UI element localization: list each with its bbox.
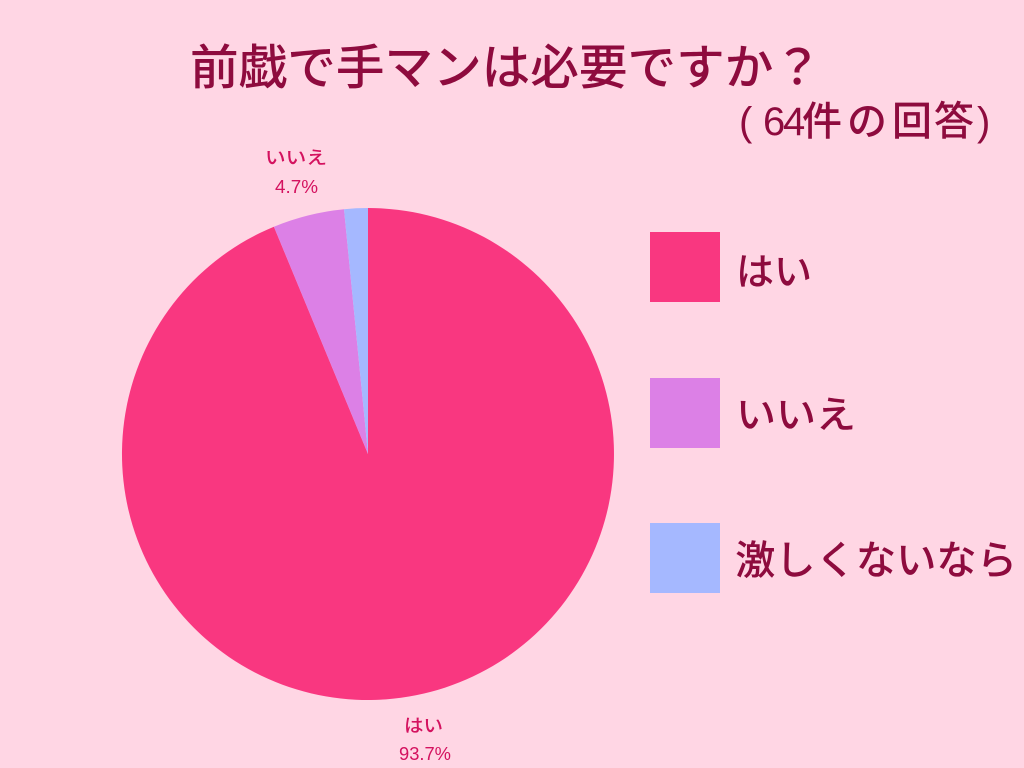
- legend item: いいえ: いいえ: [736, 395, 856, 437]
- slice: 激しくないなら: [344, 208, 368, 454]
- legend: [650, 232, 1017, 593]
- slice: はい 93.7%: [122, 208, 614, 700]
- data label: はい 93.7%: はい: [404, 716, 443, 736]
- data label: いいえ 4.7%: いいえ: [265, 148, 327, 168]
- data label: いいえ 4.7%: [265, 148, 327, 197]
- title: 前戯で手マンは必要ですか？: [190, 42, 822, 95]
- legend item: 激しくないなら: 激しくないなら: [735, 539, 1017, 583]
- legend item: 激しくないなら: [650, 523, 1017, 593]
- legend item: はい: はい: [736, 252, 812, 294]
- data label: はい 93.7%: 93.7%: [399, 744, 451, 764]
- slice: いいえ 4.7%: [274, 209, 368, 454]
- subtitle: response count: (64件の回答): [739, 100, 990, 144]
- data label: いいえ 4.7%: 4.7%: [275, 177, 318, 197]
- legend item: いいえ: [650, 378, 856, 448]
- data label: はい 93.7%: [399, 716, 451, 764]
- pie chart: [122, 208, 614, 700]
- legend item: はい: [650, 232, 812, 302]
